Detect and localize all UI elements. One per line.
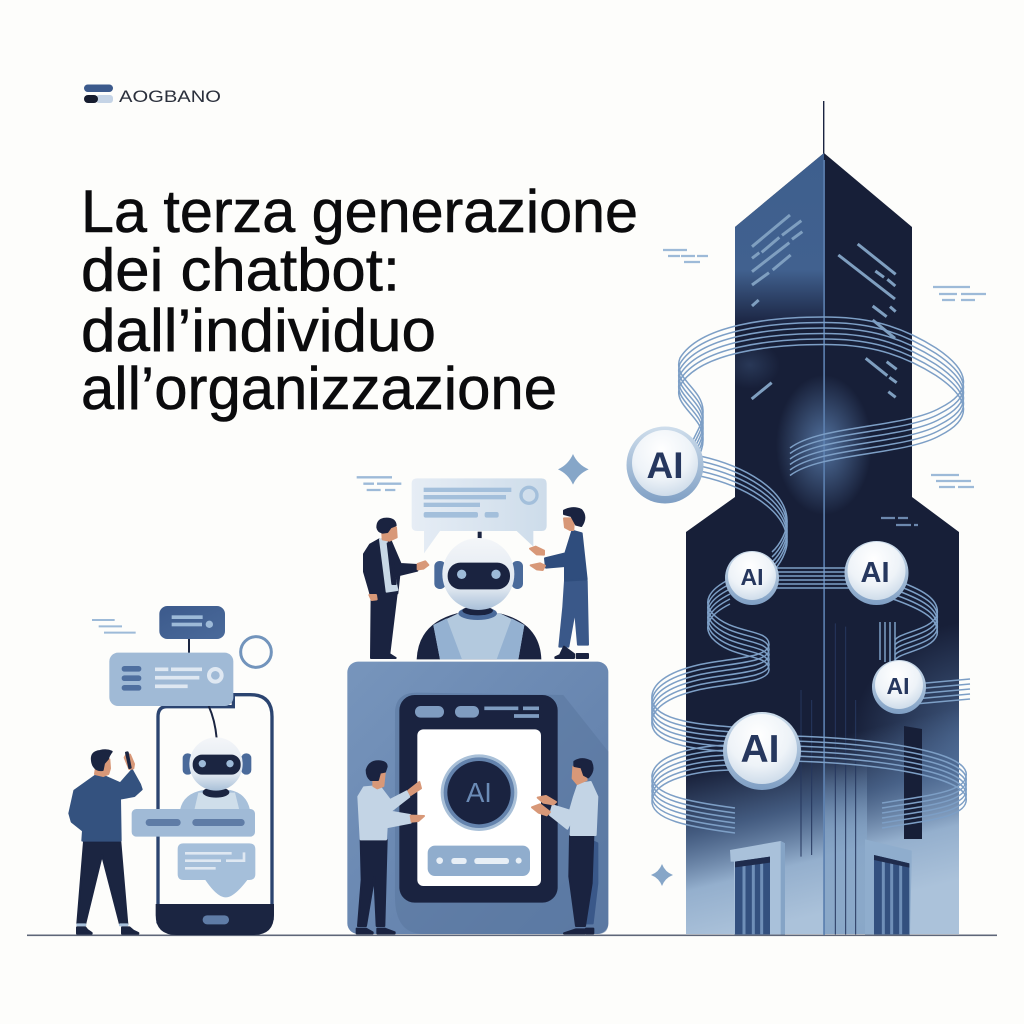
tablet xyxy=(399,695,558,903)
panel: individual phone chatbot xyxy=(69,606,274,935)
ribbon: lower right loop xyxy=(790,736,966,828)
person: man with phone xyxy=(69,750,142,934)
tower vertical lines xyxy=(801,623,856,934)
AI node: small left xyxy=(725,551,779,605)
speech bubble xyxy=(412,478,547,553)
chat bubble: top xyxy=(159,606,225,639)
phone xyxy=(156,695,274,935)
logo xyxy=(84,84,221,106)
building: left entrance xyxy=(730,841,785,934)
logo mark xyxy=(84,84,113,103)
tower window streaks xyxy=(752,215,897,399)
person: colleague in blue xyxy=(530,508,588,658)
title: all’organizzazione xyxy=(81,355,557,422)
ribbon: top loop xyxy=(679,317,964,476)
platform xyxy=(347,662,608,934)
panel: organization tower xyxy=(626,101,1024,935)
icon: sparkle xyxy=(651,864,673,886)
title: dall’individuo xyxy=(81,297,436,364)
chat bubble: menu xyxy=(109,653,233,706)
bar panel xyxy=(132,809,255,837)
ribbon: descending xyxy=(700,456,787,572)
title: La terza generazione xyxy=(81,178,638,245)
icon: sparkle xyxy=(558,454,589,485)
panel: team chatbot platform xyxy=(347,454,608,934)
title xyxy=(81,178,638,422)
person: man in suit xyxy=(364,519,428,658)
AI node: small right: AI xyxy=(886,673,910,699)
logo wordmark: AOGBANO xyxy=(119,87,221,106)
AI node: large upper left xyxy=(626,426,704,504)
AI node: large lower xyxy=(723,712,801,790)
icon: ring xyxy=(241,637,271,667)
AI node: right xyxy=(844,541,908,605)
AI node: right: AI xyxy=(860,557,890,589)
ribbon: middle band xyxy=(770,568,860,588)
ribbon: lower left loop xyxy=(652,745,735,833)
tower body xyxy=(686,153,959,935)
decorative speed lines xyxy=(92,620,136,633)
person: right man holding tablet xyxy=(532,759,597,933)
AI node: small right xyxy=(872,660,926,714)
AI node: large lower: AI xyxy=(740,728,780,771)
decorative speed lines xyxy=(357,477,401,490)
robot xyxy=(180,737,251,810)
ground line xyxy=(27,934,997,936)
AI badge: AI xyxy=(466,777,492,808)
tower antenna xyxy=(823,101,824,155)
AI node: small left: AI xyxy=(740,564,764,590)
ribbon: vertical strands xyxy=(880,622,895,668)
title: dei chatbot: xyxy=(81,236,400,304)
ribbon: right wave xyxy=(890,578,937,660)
robot xyxy=(417,532,541,659)
antenna wires xyxy=(189,639,217,738)
ribbon: small AI tail xyxy=(915,679,970,704)
dark panel on tower xyxy=(904,726,922,839)
input bar xyxy=(428,846,530,876)
building: right entrance xyxy=(865,839,912,934)
AI badge xyxy=(441,754,517,831)
decorative data lines xyxy=(663,250,986,525)
chat bubble: reply xyxy=(178,843,255,897)
AI node: large upper left: AI xyxy=(646,445,684,486)
ribbon: left wave xyxy=(652,579,769,753)
person: left man holding tablet xyxy=(357,761,424,933)
